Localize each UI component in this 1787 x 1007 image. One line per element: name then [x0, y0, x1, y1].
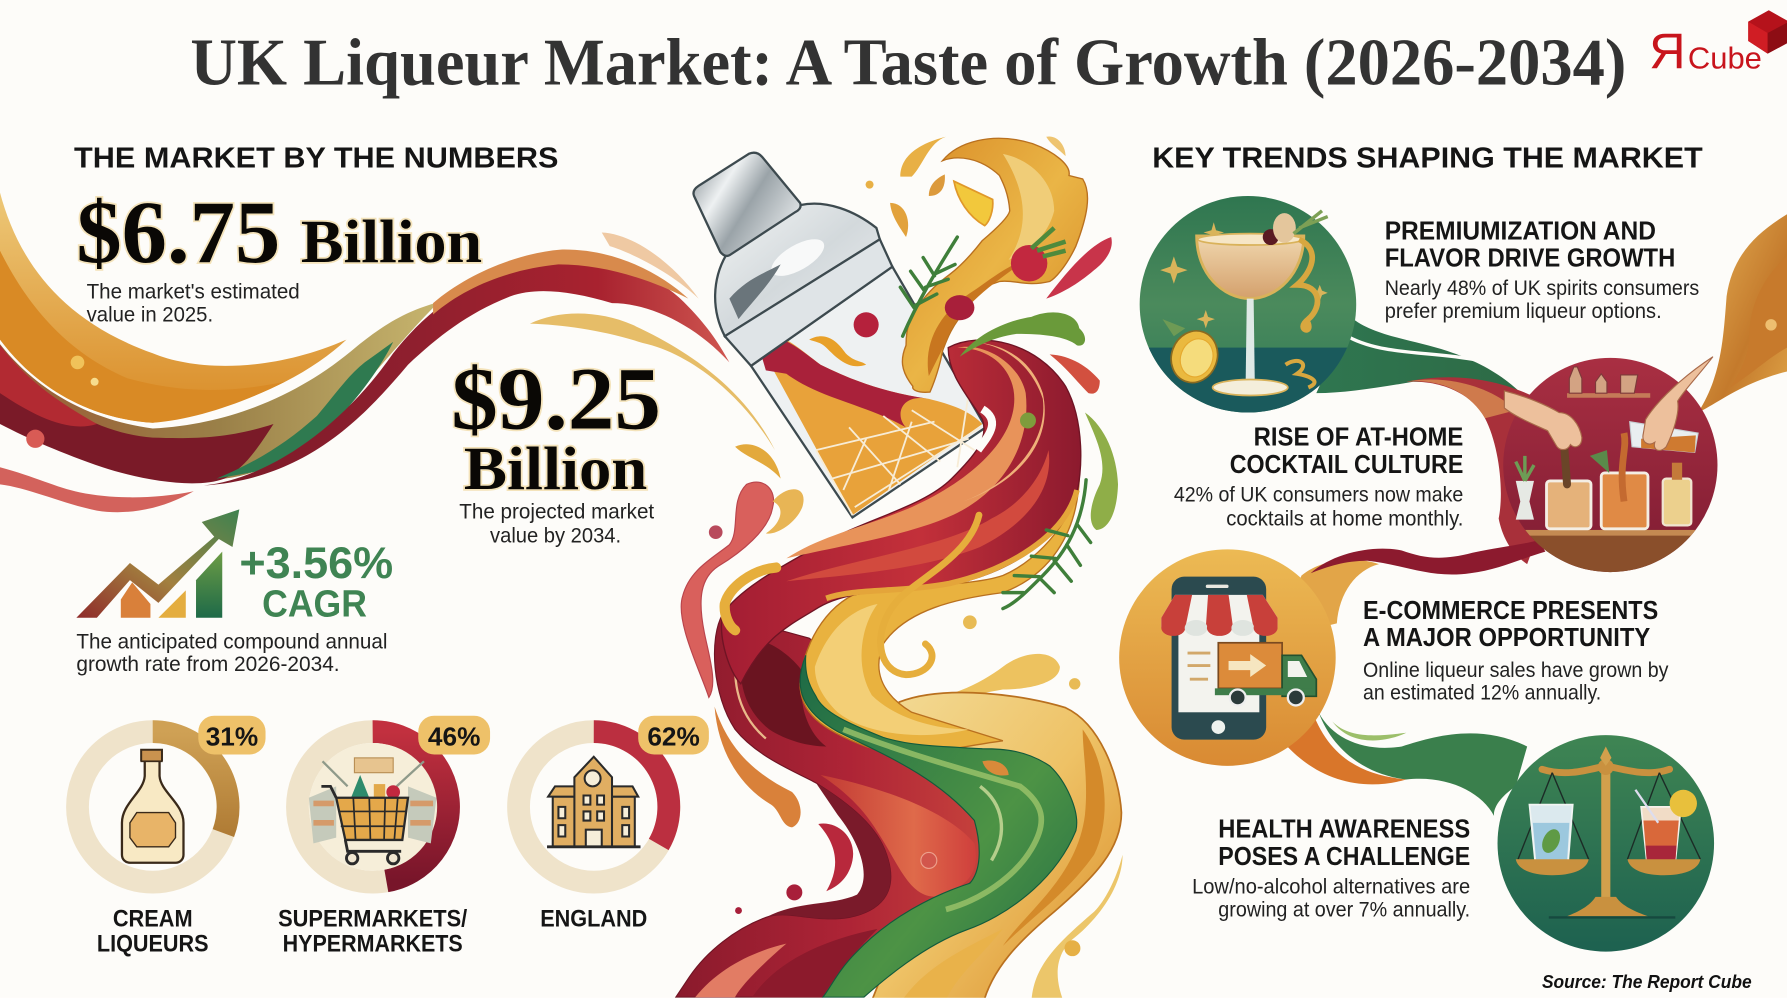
shaker glass body — [751, 267, 986, 517]
text: an estimated 12% annually. — [1363, 680, 1601, 705]
text: HEALTH AWARENESS — [1218, 814, 1470, 844]
stat: 2034 value: $9.25 — [451, 351, 661, 449]
shaker cap — [693, 153, 801, 256]
stat: 2025 value: value in 2025. — [87, 301, 213, 326]
left liqueur swoosh — [0, 193, 775, 512]
garnish: raspberries — [945, 228, 1066, 320]
stat: 2034 value: The projected market — [459, 499, 654, 524]
label — [97, 906, 209, 958]
stat: CAGR: CAGR — [262, 583, 367, 625]
central swirl: upper ribbon — [722, 340, 1081, 684]
stat: CAGR: growth rate from 2026-2034. — [76, 651, 340, 676]
title: UK Liqueur Market: A Taste of Growth (2026-2034) — [190, 24, 1626, 99]
label: ENGLAND — [540, 906, 647, 933]
gold flame splash — [902, 138, 1088, 392]
badge: 46% — [418, 716, 490, 754]
badge: 46%: 46% — [428, 721, 480, 751]
donut: supermarkets — [278, 716, 490, 958]
panel: key trends — [1119, 143, 1727, 952]
text: A MAJOR OPPORTUNITY — [1363, 622, 1651, 652]
text: 42% of UK consumers now make — [1174, 481, 1463, 506]
trend 4: health awareness — [1192, 735, 1714, 952]
text: Online liqueur sales have grown by — [1363, 657, 1669, 682]
stat: 2025 value: The market's estimated — [87, 279, 300, 304]
logo: Cube — [1688, 40, 1762, 75]
icon: growth arrow — [76, 509, 239, 618]
cocktail shaker — [693, 153, 986, 517]
text: Nearly 48% of UK spirits consumers — [1385, 275, 1699, 300]
text: growing at over 7% annually. — [1218, 896, 1470, 921]
central swirl: gold hook — [725, 568, 776, 630]
source note: Source: The Report Cube — [1542, 971, 1752, 992]
central swirl: green band — [800, 655, 1077, 997]
text — [1363, 595, 1669, 705]
stat: 2025 value: $6.75 — [76, 184, 280, 282]
right edge gold swoosh — [1698, 214, 1787, 413]
icon: shopping cart — [309, 758, 436, 864]
label: HYPERMARKETS — [283, 931, 463, 958]
stat: 2025 value: Billion — [301, 208, 482, 276]
text: Low/no-alcohol alternatives are — [1192, 873, 1470, 898]
trend 3: e-commerce — [1119, 549, 1669, 766]
stat: 2034 value: Billion — [464, 435, 647, 503]
trend 2: at-home cocktails — [1174, 357, 1727, 581]
stat: 2034 value — [451, 351, 661, 547]
central swirl: red lobe — [676, 614, 992, 997]
shaker lattice — [816, 393, 980, 515]
text: E-COMMERCE PRESENTS — [1363, 595, 1658, 625]
shaker contents — [757, 335, 982, 515]
central liqueur splash, lower layers — [681, 444, 1123, 1006]
label: SUPERMARKETS/ — [278, 906, 468, 933]
connector ribbons between trends — [1276, 317, 1550, 816]
text: COCKTAIL CULTURE — [1230, 449, 1463, 479]
label — [278, 906, 468, 958]
icon: cocktail coupe — [1134, 196, 1362, 416]
icon: building — [547, 757, 640, 847]
text — [1192, 814, 1470, 921]
logo — [1649, 10, 1787, 79]
stat: 2025 value — [76, 184, 482, 326]
badge: 31% — [198, 716, 266, 754]
central swirl: gold curl — [881, 515, 979, 675]
panel: market numbers — [74, 143, 661, 676]
logo: Я — [1649, 23, 1686, 79]
central swirl: light gold inner — [815, 604, 969, 735]
heading: market by the numbers: THE MARKET BY THE NUMBERS — [74, 143, 558, 175]
trend 1: premiumization — [1134, 196, 1699, 416]
text — [1385, 215, 1699, 323]
label: CREAM — [113, 906, 193, 933]
text: cocktails at home monthly. — [1226, 505, 1463, 530]
text: prefer premium liqueur options. — [1385, 298, 1662, 323]
label: LIQUEURS — [97, 931, 209, 958]
badge: 62%: 62% — [647, 721, 700, 751]
text: POSES A CHALLENGE — [1218, 841, 1470, 871]
icon: bottle — [122, 750, 183, 863]
central swirl: mid gold band — [800, 479, 1079, 753]
badge: 31%: 31% — [206, 721, 258, 751]
splash drops and streaks — [866, 136, 1118, 530]
donut: cream liqueurs — [77, 716, 266, 958]
text: PREMIUMIZATION AND — [1385, 215, 1656, 245]
stat: CAGR: +3.56% — [239, 539, 393, 588]
garnish: rosemary sprigs — [900, 237, 1091, 609]
badge: 62% — [638, 716, 709, 754]
stat: 2034 value: value by 2034. — [490, 522, 621, 547]
icon: phone and truck — [1119, 549, 1336, 766]
stat: CAGR: The anticipated compound annual — [76, 628, 387, 653]
heading: key trends: KEY TRENDS SHAPING THE MARKET — [1152, 143, 1703, 175]
stat: CAGR — [76, 539, 393, 676]
text: FLAVOR DRIVE GROWTH — [1385, 243, 1675, 273]
donut: england — [519, 716, 709, 933]
icon: balance scale — [1498, 735, 1714, 952]
shaker lid — [715, 204, 880, 336]
icon: bar scene — [1499, 357, 1727, 581]
central swirl: lower gold band — [870, 693, 1121, 1006]
text — [1174, 422, 1463, 530]
text: RISE OF AT-HOME — [1254, 422, 1463, 452]
garnish: lemon wedge — [954, 181, 993, 226]
